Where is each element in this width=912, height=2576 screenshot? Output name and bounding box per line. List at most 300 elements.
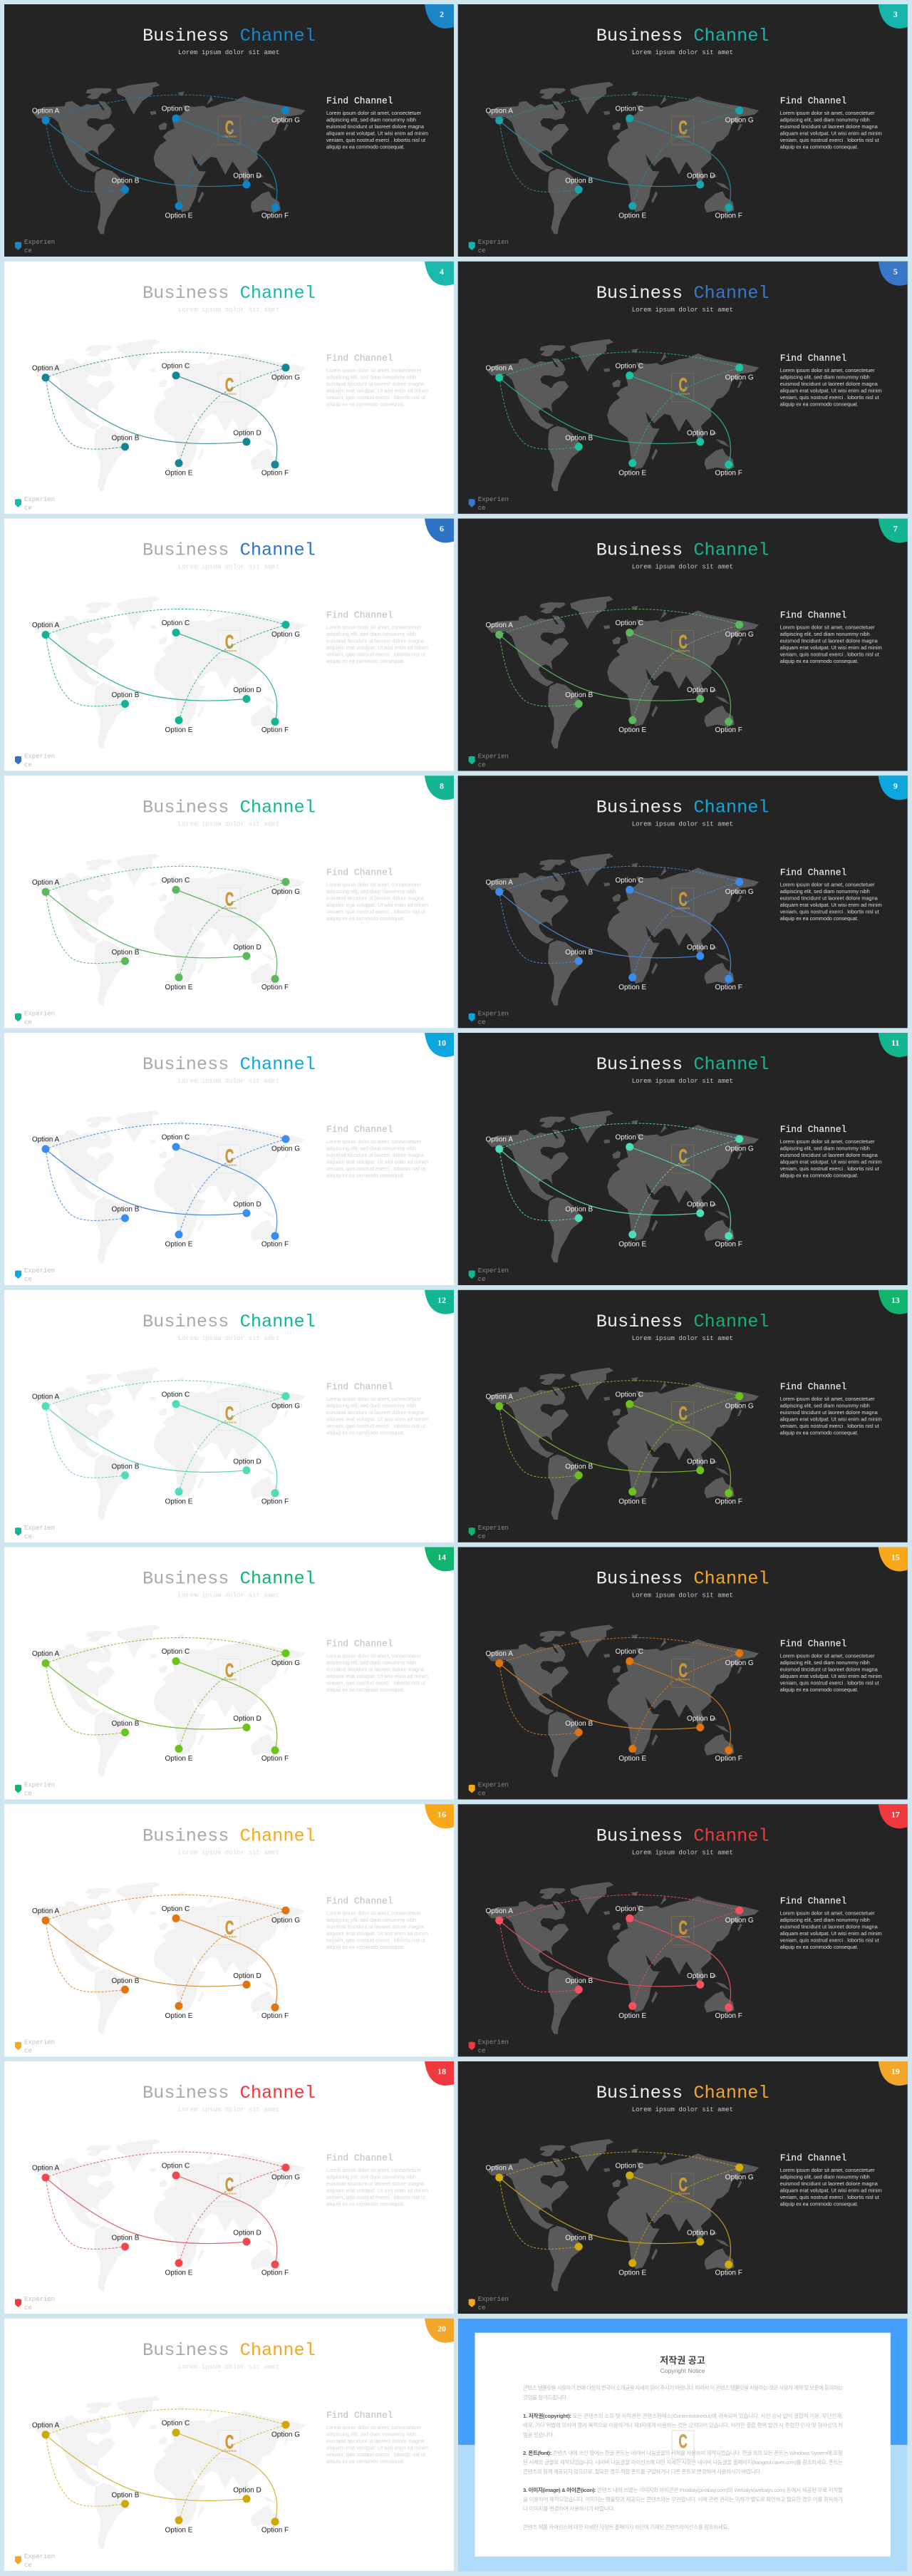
footer: Experien	[24, 496, 55, 503]
logo: C	[679, 888, 688, 910]
body text: aliquip ex ea commodo consequat.	[326, 658, 405, 664]
option labels	[32, 1391, 300, 1505]
panel: slide 12	[4, 1290, 454, 1542]
title: Business Channel	[596, 2083, 770, 2103]
location nodes	[41, 878, 289, 983]
body text: Lorem ipsum dolor sit amet, consectetuer	[780, 881, 875, 887]
body text: veniam, quis nostrud exerci . lobortis nisl ut	[326, 908, 425, 915]
location nodes	[495, 1392, 743, 1497]
location nodes	[41, 107, 289, 211]
option labels: Option A	[486, 622, 513, 629]
footer: ce	[478, 761, 486, 768]
footer	[469, 1010, 509, 1026]
slide background	[4, 4, 454, 257]
option labels: Option G	[271, 1145, 300, 1153]
option labels: Option B	[565, 434, 593, 442]
subtitle: Lorem ipsum dolor sit amet	[632, 2106, 733, 2113]
title: Business Channel	[596, 1054, 770, 1075]
world map	[487, 339, 759, 491]
option labels: Option A	[486, 879, 513, 887]
logo: C	[225, 1403, 234, 1424]
option labels: Option A	[32, 1907, 60, 1915]
footer: Experien	[24, 2039, 55, 2046]
footer: ce	[478, 2304, 486, 2312]
body text: veniam, quis nostrud exerci . lobortis nisl ut	[780, 1679, 879, 1686]
page badge: 14	[437, 1552, 446, 1562]
option labels: Option B	[565, 1463, 593, 1470]
option labels: Option F	[261, 984, 289, 991]
logo	[218, 2173, 240, 2202]
option labels: Option G	[725, 1145, 754, 1153]
body text: aliquam erat volutpat. Ut wisi enim ad minim	[326, 130, 428, 137]
body text	[780, 1652, 882, 1693]
panel: slide 2	[4, 4, 454, 257]
body text: adipiscing elit, sed diam nonummy nibh	[780, 373, 870, 380]
body text: aliquam erat volutpat. Ut wisi enim ad minim	[326, 644, 428, 651]
body text: adipiscing elit, sed diam nonummy nibh	[326, 117, 416, 123]
body text: adipiscing elit, sed diam nonummy nibh	[326, 2174, 416, 2180]
logo: C	[225, 2431, 234, 2453]
option labels: Option F	[715, 726, 742, 734]
option labels	[32, 105, 300, 220]
option labels: Option E	[618, 469, 646, 477]
footer: Experien	[24, 2553, 55, 2560]
option labels: Option B	[565, 949, 593, 957]
world map	[487, 1368, 759, 1520]
world map	[33, 596, 306, 748]
body text: aliquam erat volutpat. Ut wisi enim ad minim	[326, 1416, 428, 1422]
body text: Lorem ipsum dolor sit amet, consectetuer	[326, 1652, 422, 1659]
page badge: 11	[891, 1038, 899, 1048]
footer: ce	[24, 247, 32, 254]
world map	[487, 1882, 759, 2034]
logo: CONTENTS	[676, 393, 690, 396]
option labels: Option A	[32, 2164, 60, 2173]
channel routes	[46, 1381, 286, 1493]
option labels: Option G	[271, 117, 300, 124]
option labels: Option D	[233, 172, 261, 180]
subtitle: Lorem ipsum dolor sit amet	[632, 820, 733, 828]
title: Business Channel	[142, 2340, 316, 2361]
logo	[672, 887, 694, 916]
option labels: Option E	[165, 1755, 193, 1763]
notice background blue	[458, 2319, 908, 2445]
body text: aliquip ex ea commodo consequat.	[326, 915, 405, 922]
option labels: Option D	[233, 2486, 261, 2494]
slide background	[458, 262, 908, 514]
body text: aliquip ex ea commodo consequat.	[780, 1172, 859, 1179]
world map	[33, 2396, 306, 2548]
notice logo: C	[678, 2431, 688, 2452]
slide background	[4, 2319, 454, 2571]
option labels: Option C	[162, 1648, 190, 1656]
body text	[326, 624, 428, 664]
page badge: 4	[440, 267, 444, 277]
body text: euismod tincidunt ut laoreet dolore magna	[780, 1152, 878, 1158]
body text: veniam, quis nostrud exerci . lobortis nisl ut	[326, 1423, 425, 1429]
page badge: 7	[893, 523, 898, 533]
notice heading: 저작권 공고	[660, 2355, 705, 2366]
logo	[672, 630, 694, 659]
option labels: Option A	[32, 622, 60, 629]
option labels	[486, 362, 754, 477]
page badge: 10	[437, 1038, 446, 1048]
option labels: Option F	[715, 1755, 742, 1763]
subtitle: Lorem ipsum dolor sit amet	[178, 2106, 279, 2113]
option labels: Option B	[565, 1206, 593, 1213]
logo: C	[679, 1145, 688, 1167]
body text: Lorem ipsum dolor sit amet, consectetuer	[780, 110, 875, 116]
panel: slide 15	[458, 1547, 908, 1799]
option labels: Option C	[615, 105, 643, 113]
body text: veniam, quis nostrud exerci . lobortis nisl ut	[326, 2451, 425, 2458]
option labels: Option A	[32, 879, 60, 887]
title: Business Channel	[142, 2083, 316, 2103]
body text	[326, 1138, 428, 1179]
body text: adipiscing elit, sed diam nonummy nibh	[326, 888, 416, 895]
footer	[469, 239, 509, 254]
slide background	[4, 1547, 454, 1799]
option labels: Option F	[261, 1755, 289, 1763]
option labels: Option D	[687, 172, 715, 180]
channel routes	[46, 609, 286, 721]
option labels: Option C	[162, 619, 190, 627]
body text: euismod tincidunt ut laoreet dolore magna	[326, 1152, 424, 1158]
channel routes	[46, 866, 286, 979]
body text	[780, 2167, 882, 2207]
option labels: Option D	[687, 1715, 715, 1723]
notice white card	[475, 2333, 891, 2557]
title: Business Channel	[142, 1054, 316, 1075]
world map	[33, 853, 306, 1006]
option labels	[32, 1133, 300, 1249]
world map	[487, 1624, 759, 1777]
option labels	[32, 2163, 300, 2277]
option labels: Option E	[165, 2270, 193, 2277]
option labels: Option B	[565, 2234, 593, 2242]
body text: aliquip ex ea commodo consequat.	[326, 401, 405, 407]
world map	[33, 339, 306, 491]
body text: Lorem ipsum dolor sit amet, consectetuer	[780, 1910, 875, 1916]
logo: CONTENTS	[222, 1421, 237, 1424]
notice body text: 것임을 알려드립니다.	[523, 2394, 568, 2401]
location nodes	[495, 364, 743, 468]
option labels: Option B	[112, 434, 140, 442]
logo: C	[225, 888, 234, 910]
body text: adipiscing elit, sed diam nonummy nibh	[780, 2174, 870, 2180]
option labels: Option E	[618, 2270, 646, 2277]
logo: CONTENTS	[676, 1164, 690, 1167]
logo: C	[679, 117, 688, 138]
slide background	[4, 1033, 454, 1285]
option labels: Option D	[687, 1200, 715, 1209]
option labels: Option E	[165, 2526, 193, 2534]
option labels: Option C	[162, 105, 190, 113]
find channel heading: Find Channel	[326, 353, 393, 364]
body text: adipiscing elit, sed diam nonummy nibh	[780, 631, 870, 637]
option labels: Option B	[565, 1977, 593, 1985]
body text: veniam, quis nostrud exerci . lobortis nisl ut	[326, 1937, 425, 1943]
logo: C	[679, 2174, 688, 2195]
option labels: Option F	[261, 2526, 289, 2534]
subtitle: Lorem ipsum dolor sit amet	[632, 306, 733, 314]
notice body text: 3. 이미지(image) & 아이콘(icon): 콘텐츠 내에 쓰였는 이미지와 아이콘은 Pixabay(pixabay.com)와 Webalys(webalys.com) 등에서 제공된 무료 저작물	[523, 2486, 843, 2493]
option labels: Option D	[233, 944, 261, 952]
logo: CONTENTS	[222, 907, 237, 910]
body text: adipiscing elit, sed diam nonummy nibh	[326, 1402, 416, 1408]
logo	[672, 116, 694, 145]
footer	[469, 1782, 509, 1798]
body text: aliquip ex ea commodo consequat.	[326, 2458, 405, 2464]
option labels: Option C	[615, 1391, 643, 1398]
location nodes	[495, 1135, 743, 1240]
option labels: Option F	[715, 2270, 742, 2277]
body text: Lorem ipsum dolor sit amet, consectetuer	[326, 624, 422, 630]
channel routes	[46, 95, 286, 207]
footer: ce	[478, 247, 486, 254]
logo	[672, 2173, 694, 2202]
panel: slide 8	[4, 776, 454, 1028]
page badge	[879, 1547, 908, 1571]
option labels: Option G	[725, 1402, 754, 1410]
channel routes	[46, 2152, 286, 2265]
notice body text: 을 이용하여 제작되었습니다. 이미지는 템플릿과 제공되는 콘텐츠와는 무관합니다. 이에 관련 권리는 귀하가 별도로 확인하고 필요한 경우 이를 취득하거	[523, 2495, 843, 2503]
location nodes	[41, 1649, 289, 1754]
notice body text: 2. 폰트(font): 콘텐츠 내에 쓰인 영어는 한글 폰트는 네이버 나눔글꼴의 서체를 사용하여 제작되었습니다. 한글 외의 모든 폰트는 Windows System에 포함	[523, 2449, 843, 2456]
logo: CONTENTS	[222, 2193, 237, 2195]
find channel heading: Find Channel	[326, 1124, 393, 1135]
body text	[326, 367, 428, 407]
option labels	[486, 2163, 754, 2277]
option labels: Option E	[618, 984, 646, 991]
subtitle: Lorem ipsum dolor sit amet	[632, 48, 733, 56]
option labels	[486, 1391, 754, 1505]
page badge	[879, 262, 908, 286]
world map	[33, 2139, 306, 2291]
page badge: 17	[891, 1809, 900, 1819]
panel: slide 19	[458, 2061, 908, 2314]
channel routes	[499, 1895, 740, 2007]
option labels: Option B	[112, 1206, 140, 1213]
body text: aliquam erat volutpat. Ut wisi enim ad minim	[326, 902, 428, 908]
footer: Experien	[478, 496, 509, 503]
logo: C	[679, 374, 688, 396]
body text: Lorem ipsum dolor sit amet, consectetuer	[780, 367, 875, 373]
option labels: Option E	[165, 2012, 193, 2020]
option labels: Option B	[112, 1977, 140, 1985]
option labels: Option G	[725, 888, 754, 896]
channel routes	[499, 1123, 740, 1236]
logo: C	[679, 1403, 688, 1424]
footer: ce	[24, 2304, 32, 2312]
footer: ce	[24, 761, 32, 768]
option labels	[486, 877, 754, 991]
page badge	[879, 4, 908, 29]
option labels: Option C	[162, 362, 190, 370]
page badge: 5	[893, 267, 898, 277]
panel: slide 6	[4, 519, 454, 771]
body text: Lorem ipsum dolor sit amet, consectetuer	[326, 1910, 422, 1916]
option labels: Option B	[565, 1720, 593, 1728]
footer: ce	[24, 1533, 32, 1540]
option labels: Option E	[618, 1240, 646, 1249]
slide background	[458, 519, 908, 771]
option labels	[486, 1648, 754, 1763]
option labels: Option C	[162, 1133, 190, 1142]
option labels: Option E	[618, 726, 646, 734]
body text: aliquam erat volutpat. Ut wisi enim ad minim	[780, 1416, 882, 1422]
title: Business Channel	[142, 540, 316, 560]
find channel heading: Find Channel	[326, 1895, 393, 1906]
logo: C	[679, 1659, 688, 1681]
find channel heading: Find Channel	[780, 96, 847, 106]
option labels: Option F	[261, 2270, 289, 2277]
option labels: Option G	[271, 1402, 300, 1410]
slide background	[458, 4, 908, 257]
find channel heading: Find Channel	[326, 610, 393, 620]
footer: ce	[478, 2047, 486, 2054]
footer: ce	[24, 505, 32, 512]
footer: ce	[478, 505, 486, 512]
page badge	[879, 1033, 908, 1057]
location nodes	[41, 364, 289, 468]
footer	[469, 496, 509, 512]
page badge	[879, 1290, 908, 1314]
logo: CONTENTS	[676, 2193, 690, 2195]
find channel heading: Find Channel	[326, 1638, 393, 1649]
option labels: Option C	[615, 1133, 643, 1142]
option labels	[486, 105, 754, 220]
option labels: Option C	[615, 2163, 643, 2170]
option labels: Option D	[687, 686, 715, 694]
option labels: Option D	[233, 1715, 261, 1723]
body text: Lorem ipsum dolor sit amet, consectetuer	[780, 624, 875, 630]
body text: aliquam erat volutpat. Ut wisi enim ad minim	[326, 2444, 428, 2451]
option labels: Option E	[165, 469, 193, 477]
option labels: Option F	[261, 212, 289, 220]
panel: slide 16	[4, 1804, 454, 2056]
body text: euismod tincidunt ut laoreet dolore magna	[780, 381, 878, 387]
body text	[780, 624, 882, 664]
location nodes	[495, 878, 743, 983]
body text: aliquam erat volutpat. Ut wisi enim ad minim	[326, 1159, 428, 1165]
body text: Lorem ipsum dolor sit amet, consectetuer	[326, 1138, 422, 1145]
footer: ce	[478, 1276, 486, 1283]
footer	[15, 2296, 55, 2312]
notice body text: 콘텐츠 제품 라이선스에 대한 자세한 사항은 홈페이지 하단에 기재된 콘텐츠라이선스를 참조하세요.	[523, 2523, 729, 2530]
option labels: Option G	[271, 631, 300, 639]
title: Business Channel	[596, 1825, 770, 1846]
body text: euismod tincidunt ut laoreet dolore magna	[326, 1923, 424, 1930]
option labels: Option G	[725, 631, 754, 639]
body text: adipiscing elit, sed diam nonummy nibh	[780, 1402, 870, 1408]
option labels: Option A	[32, 364, 60, 372]
body text: adipiscing elit, sed diam nonummy nibh	[326, 631, 416, 637]
logo: C	[679, 1917, 688, 1938]
logo	[672, 1402, 694, 1431]
logo: CONTENTS	[676, 907, 690, 910]
page badge	[425, 4, 454, 29]
find channel heading: Find Channel	[326, 2410, 393, 2421]
footer: Experien	[24, 2296, 55, 2303]
option labels: Option C	[162, 1905, 190, 1913]
slide background	[458, 2061, 908, 2314]
body text: adipiscing elit, sed diam nonummy nibh	[326, 1659, 416, 1666]
logo	[672, 1145, 694, 1173]
body text: aliquam erat volutpat. Ut wisi enim ad minim	[780, 130, 882, 137]
body text: euismod tincidunt ut laoreet dolore magna	[780, 2180, 878, 2187]
option labels	[32, 877, 300, 991]
slide background	[458, 1033, 908, 1285]
option labels: Option G	[271, 2174, 300, 2181]
slide background	[4, 2061, 454, 2314]
option labels	[32, 1905, 300, 2020]
find channel heading: Find Channel	[780, 353, 847, 364]
location nodes	[495, 621, 743, 726]
world map	[487, 853, 759, 1006]
option labels: Option D	[687, 944, 715, 952]
logo: C	[225, 2174, 234, 2195]
panel: slide 3	[458, 4, 908, 257]
channel routes	[499, 2152, 740, 2265]
body text: aliquip ex ea commodo consequat.	[326, 2201, 405, 2207]
option labels: Option F	[261, 726, 289, 734]
body text: veniam, quis nostrud exerci . lobortis nisl ut	[780, 1165, 879, 1172]
world map	[33, 1624, 306, 1777]
footer: Experien	[478, 1525, 509, 1532]
option labels: Option B	[112, 691, 140, 699]
find channel heading: Find Channel	[326, 2153, 393, 2163]
page badge: 12	[437, 1295, 446, 1305]
body text: Lorem ipsum dolor sit amet, consectetuer	[780, 1138, 875, 1145]
option labels: Option E	[165, 1498, 193, 1505]
body text: aliquam erat volutpat. Ut wisi enim ad minim	[326, 1930, 428, 1937]
option labels: Option F	[261, 469, 289, 477]
option labels: Option B	[565, 691, 593, 699]
option labels: Option E	[165, 1240, 193, 1249]
body text	[780, 1396, 882, 1436]
slide background	[458, 1547, 908, 1799]
option labels: Option A	[486, 2164, 513, 2173]
body text: aliquip ex ea commodo consequat.	[326, 1686, 405, 1693]
title: Business Channel	[596, 283, 770, 304]
body text: veniam, quis nostrud exerci . lobortis nisl ut	[780, 2194, 879, 2200]
page badge	[425, 1547, 454, 1571]
body text	[780, 881, 882, 922]
panel: copyright notice	[458, 2319, 908, 2572]
option labels: Option D	[233, 2230, 261, 2237]
option labels: Option D	[687, 429, 715, 437]
option labels: Option B	[112, 949, 140, 957]
option labels: Option D	[687, 1972, 715, 1980]
footer	[15, 2553, 55, 2569]
title: Business Channel	[142, 1825, 316, 1846]
option labels: Option C	[615, 1905, 643, 1913]
logo	[672, 1916, 694, 1944]
page badge: 15	[891, 1552, 900, 1562]
footer: ce	[24, 2047, 32, 2054]
body text: euismod tincidunt ut laoreet dolore magna	[780, 123, 878, 130]
channel routes	[499, 95, 740, 207]
body text: adipiscing elit, sed diam nonummy nibh	[780, 888, 870, 895]
subtitle: Lorem ipsum dolor sit amet	[178, 48, 279, 56]
body text: veniam, quis nostrud exerci . lobortis nisl ut	[780, 1423, 879, 1429]
footer: Experien	[478, 2039, 509, 2046]
body text: veniam, quis nostrud exerci . lobortis nisl ut	[780, 908, 879, 915]
subtitle: Lorem ipsum dolor sit amet	[632, 1334, 733, 1342]
world map	[487, 82, 759, 234]
body text: Lorem ipsum dolor sit amet, consectetuer	[326, 2424, 422, 2431]
